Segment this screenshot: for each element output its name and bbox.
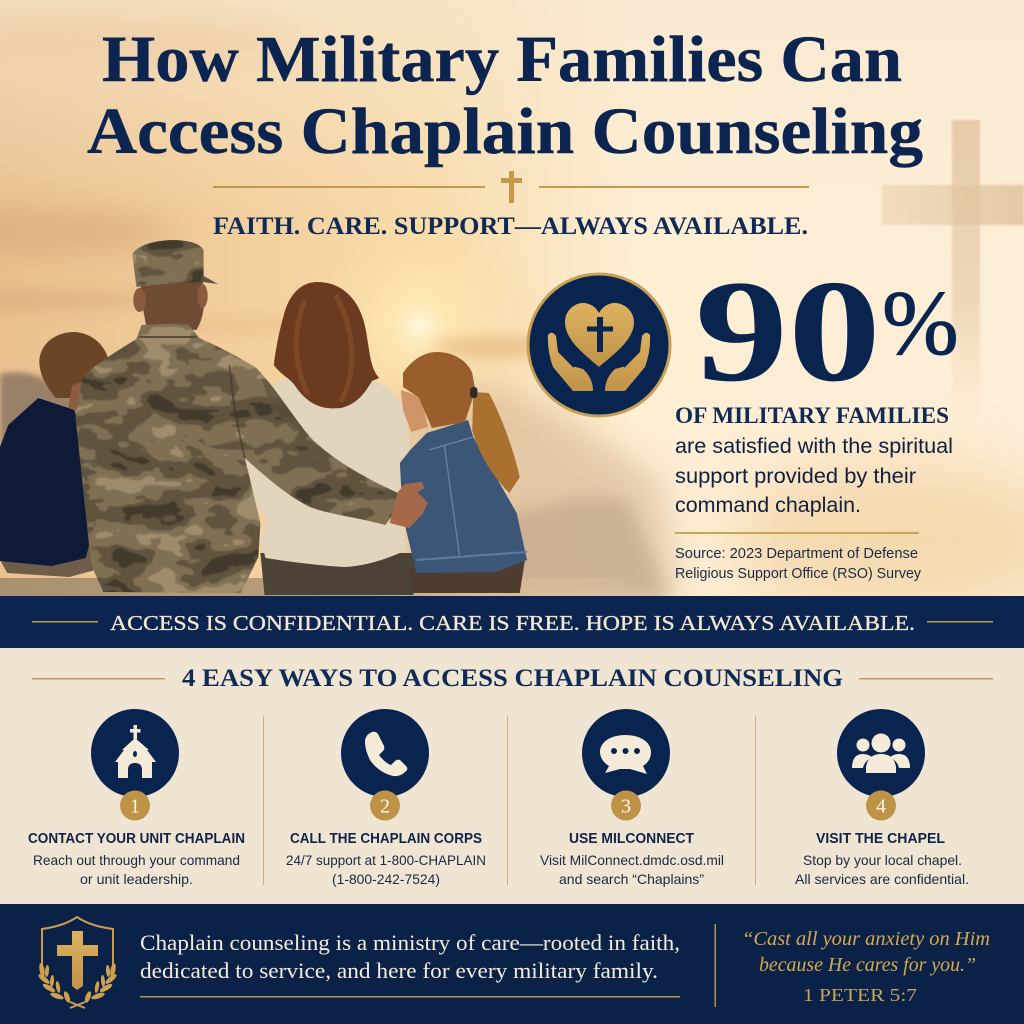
step 2 description: 24/7 support at 1-800-CHAPLAIN <box>286 852 486 868</box>
section heading: 4 EASY WAYS TO ACCESS CHAPLAIN COUNSELING <box>182 665 843 692</box>
stat description: command chaplain. <box>675 494 861 517</box>
step 1 description <box>33 852 240 887</box>
step 4: visit the chapel <box>795 709 969 887</box>
title divider with gold cross <box>213 171 809 203</box>
stat: 90 percent: % <box>882 272 959 374</box>
patrol cap <box>132 240 218 287</box>
step 4 description: All services are confidential. <box>795 871 969 887</box>
number badge 2 <box>370 790 400 820</box>
panel: footer <box>0 904 1024 1024</box>
number badge 1: 1 <box>130 796 140 818</box>
step 4 description: Stop by your local chapel. <box>803 852 962 868</box>
number badge 3 <box>611 790 641 820</box>
girl with denim jacket and ponytail <box>400 352 527 593</box>
step 2 heading: CALL THE CHAPLAIN CORPS <box>290 831 482 847</box>
soldier in camouflage uniform and patrol cap <box>62 238 428 600</box>
number badge 1 <box>120 790 150 820</box>
number badge 4 <box>866 790 896 820</box>
step 3 description: and search “Chaplains” <box>559 871 704 887</box>
step 2: call the chaplain corps <box>286 709 486 887</box>
step 3 description: Visit MilConnect.dmdc.osd.mil <box>540 852 724 868</box>
step 3 description <box>540 852 724 887</box>
number badge 2: 2 <box>380 796 390 818</box>
stone ledge <box>0 578 640 596</box>
hand resting on the girl <box>390 482 428 528</box>
icon: telephone <box>341 709 429 797</box>
stat description: support provided by their <box>675 465 916 488</box>
banner: access is confidential <box>0 596 1024 648</box>
icon: shield with cross and laurel <box>37 917 118 1008</box>
hero background: sunset sky <box>0 0 1024 620</box>
step 1: contact your unit chaplain <box>28 709 245 887</box>
icon: hands holding heart with cross <box>528 274 670 416</box>
scripture quote <box>742 928 990 1005</box>
title: Access Chaplain Counseling <box>87 95 923 168</box>
footer statement: dedicated to service, and here for every military family. <box>140 958 658 983</box>
stat description: Source: 2023 Department of Defense <box>675 546 918 562</box>
photo: family seen from behind <box>0 238 527 600</box>
banner: access is confidential: ACCESS IS CONFIDENTIAL. CARE IS FREE. HOPE IS ALWAYS AVAILABLE. <box>110 611 915 635</box>
step 1 description: Reach out through your command <box>33 852 240 868</box>
step 1 heading: CONTACT YOUR UNIT CHAPLAIN <box>28 831 245 847</box>
stat: 90 percent: 90 <box>695 251 881 412</box>
footer statement <box>140 930 680 983</box>
stat description: OF MILITARY FAMILIES <box>675 403 949 428</box>
icon: group of people <box>837 709 925 797</box>
stat description: Religious Support Office (RSO) Survey <box>675 566 922 582</box>
title: How Military Families Can <box>102 23 902 96</box>
step 2 description <box>286 852 486 887</box>
scripture quote: 1 PETER 5:7 <box>803 985 917 1005</box>
camouflage jacket <box>76 323 398 593</box>
panel: four ways section <box>0 648 1024 904</box>
stat description: are satisfied with the spiritual <box>675 435 953 458</box>
boy in navy shirt <box>0 332 110 577</box>
woman with long brown hair and cream sweater <box>243 282 422 595</box>
step 3: use milconnect <box>540 709 724 887</box>
number badge 4: 4 <box>876 796 886 818</box>
step 3 heading: USE MILCONNECT <box>569 831 694 847</box>
icon: church <box>91 709 179 797</box>
step 4 heading: VISIT THE CHAPEL <box>816 831 945 847</box>
scripture quote: “Cast all your anxiety on Him <box>742 928 990 950</box>
icon: speech bubble <box>582 709 670 797</box>
number badge 3: 3 <box>621 796 631 818</box>
footer statement: Chaplain counseling is a ministry of care—rooted in faith, <box>140 930 680 955</box>
scripture quote: because He cares for you.” <box>759 954 976 976</box>
tagline: FAITH. CARE. SUPPORT—ALWAYS AVAILABLE. <box>213 213 808 240</box>
step 4 description <box>795 852 969 887</box>
step 2 description: (1-800-242-7524) <box>332 871 440 887</box>
stat description <box>675 403 953 582</box>
title <box>87 23 923 168</box>
faded background cross <box>882 120 1024 420</box>
step 1 description: or unit leadership. <box>80 871 193 887</box>
